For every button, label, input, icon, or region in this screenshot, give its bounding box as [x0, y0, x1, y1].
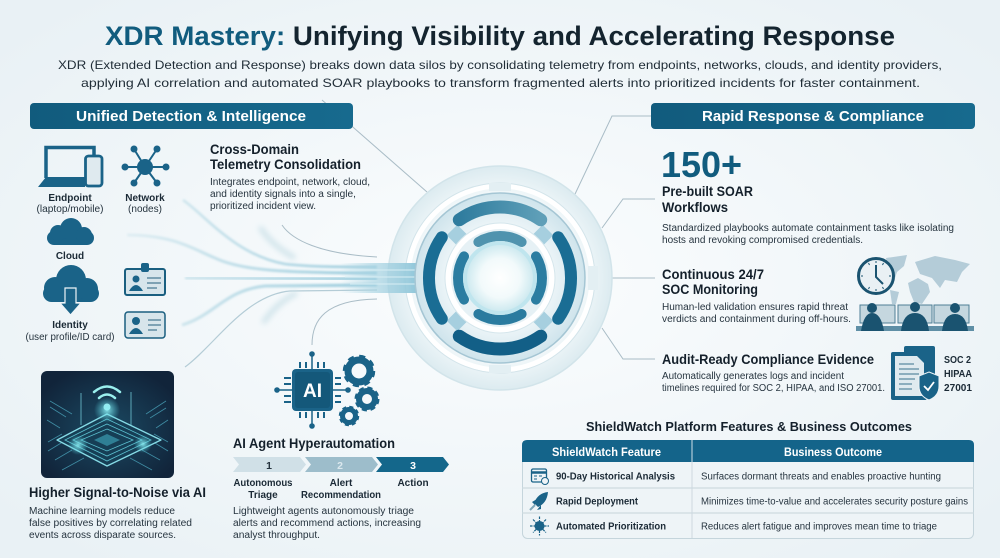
text block: signal-to-noise: false positives by correlating related [29, 518, 192, 529]
text block: cross-domain telemetry: and identity signals into a single, [210, 189, 356, 200]
row: 90-day historical analysis [531, 469, 941, 484]
process chevrons: 3 [410, 460, 416, 472]
header: Rapid Response & Compliance: Rapid Response & Compliance [702, 108, 924, 125]
icon: clock, world map and SOC analysts [856, 247, 974, 331]
title: XDR Mastery: Unifying Visibility and Accelerating Response [105, 21, 895, 51]
compliance labels: SOC 2 [944, 355, 971, 366]
text block: lightweight agents: alerts and recommend actions, increasing [233, 518, 421, 529]
row: rapid deployment: Rapid Deployment [556, 496, 639, 508]
compliance labels [944, 355, 972, 394]
row: 90-day historical analysis: Surfaces dormant threats and enables proactive hunting [701, 472, 941, 482]
features table: ShieldWatch Feature [552, 447, 661, 459]
stat: 150+ workflows: Workflows [662, 200, 728, 215]
icon: cloud [47, 218, 94, 245]
icon: ID badge [125, 263, 165, 295]
intro text: XDR (Extended Detection and Response) breaks down data silos by consolidating telemetry from endpoints, networks, clouds, and identity providers, [58, 58, 942, 72]
text block: audit-ready compliance [662, 351, 885, 394]
row: automated prioritization: Reduces alert fatigue and improves mean time to triage [701, 522, 937, 532]
text block: SOC monitoring: Continuous 24/7 [662, 266, 764, 282]
label: network: (nodes) [128, 204, 162, 215]
label: cloud: Cloud [56, 251, 84, 262]
features table: Business Outcome [784, 447, 882, 459]
text block: cross-domain telemetry: prioritized incident view. [210, 201, 316, 212]
intro text: applying AI correlation and automated SOAR playbooks to transform fragmented alerts into prioritized incidents for faster containment. [81, 76, 920, 90]
connector lines [185, 100, 655, 367]
label: endpoint: (laptop/mobile) [36, 204, 104, 215]
row: rapid deployment: Minimizes time-to-value and accelerates security posture gains [701, 496, 968, 508]
text block: lightweight agents [233, 506, 421, 541]
stat: 150+ workflows: hosts and revoking compromised credentials. [662, 235, 863, 246]
stat: 150+ workflows [661, 144, 954, 246]
step labels: Recommendation [301, 490, 381, 501]
text block: lightweight agents: Lightweight agents autonomously triage [233, 506, 414, 517]
text block: signal-to-noise: events across disparate sources. [29, 530, 176, 541]
stat: 150+ workflows: 150+ [661, 144, 742, 185]
icon: ID card [125, 312, 165, 338]
process chevrons: 2 [337, 460, 343, 472]
icon: compliance document and shield [891, 346, 939, 400]
text block: SOC monitoring: Human-led validation ensures rapid threat [662, 302, 848, 313]
central hub [340, 166, 612, 390]
text block: signal-to-noise [29, 484, 206, 541]
row: rapid deployment [530, 492, 968, 510]
process chevrons [233, 457, 449, 472]
step labels [234, 478, 429, 501]
text block: lightweight agents: analyst throughput. [233, 530, 320, 541]
icon: AI chip and gears: AI [303, 381, 322, 402]
icon: identity cloud with down arrow [43, 265, 99, 315]
header: Unified Detection & Intelligence: Unified Detection & Intelligence [76, 108, 306, 125]
text block: SOC monitoring: SOC Monitoring [662, 281, 758, 297]
label: network: Network [125, 193, 165, 204]
text block: audit-ready compliance: timelines required for SOC 2, HIPAA, and ISO 27001. [662, 383, 885, 394]
row: 90-day historical analysis: 90-Day Historical Analysis [556, 472, 675, 482]
text block: cross-domain telemetry [210, 141, 370, 212]
text block: cross-domain telemetry: Integrates endpoint, network, cloud, [210, 177, 370, 188]
step labels: Alert [330, 478, 353, 489]
row: automated prioritization: Automated Prioritization [556, 522, 666, 532]
label: endpoint [36, 193, 104, 215]
compliance labels: HIPAA [944, 369, 972, 380]
label: identity: Identity [52, 320, 88, 331]
stat: 150+ workflows: Standardized playbooks automate containment tasks like isolating [662, 223, 954, 234]
icon: network nodes [122, 146, 170, 186]
label: identity: (user profile/ID card) [26, 332, 114, 343]
step labels: Action [397, 478, 429, 489]
text block: audit-ready compliance: Automatically generates logs and incident [662, 371, 844, 382]
text block: SOC monitoring [662, 266, 851, 325]
text block: audit-ready compliance: Audit-Ready Compliance Evidence [662, 351, 874, 367]
header: Unified Detection & Intelligence [30, 103, 353, 129]
row: automated prioritization [530, 516, 937, 536]
icon: endpoint laptop and mobile [38, 148, 102, 187]
text block: SOC monitoring: verdicts and containment during off-hours. [662, 314, 851, 325]
stat: 150+ workflows: Pre-built SOAR [662, 184, 753, 199]
image: AI signal chip [41, 371, 174, 478]
data flow streams [127, 200, 377, 325]
text block: signal-to-noise: Higher Signal-to-Noise via AI [29, 484, 206, 500]
heading: AI agent hyperautomation: AI Agent Hyperautomation [233, 435, 395, 451]
features table [522, 440, 974, 538]
label: identity [26, 320, 114, 343]
step labels: Autonomous [234, 478, 293, 489]
table heading: ShieldWatch Platform Features & Business Outcomes [586, 419, 912, 434]
text block: cross-domain telemetry: Telemetry Consolidation [210, 156, 361, 172]
process chevrons: 1 [266, 460, 272, 472]
icon: AI chip and gears [274, 351, 378, 429]
label: endpoint: Endpoint [48, 193, 92, 204]
compliance labels: 27001 [944, 383, 972, 394]
intro text [58, 58, 942, 90]
label: network [125, 193, 165, 215]
text block: signal-to-noise: Machine learning models reduce [29, 506, 175, 517]
header: Rapid Response & Compliance [651, 103, 975, 129]
text block: cross-domain telemetry: Cross-Domain [210, 141, 299, 157]
step labels: Triage [248, 490, 278, 501]
